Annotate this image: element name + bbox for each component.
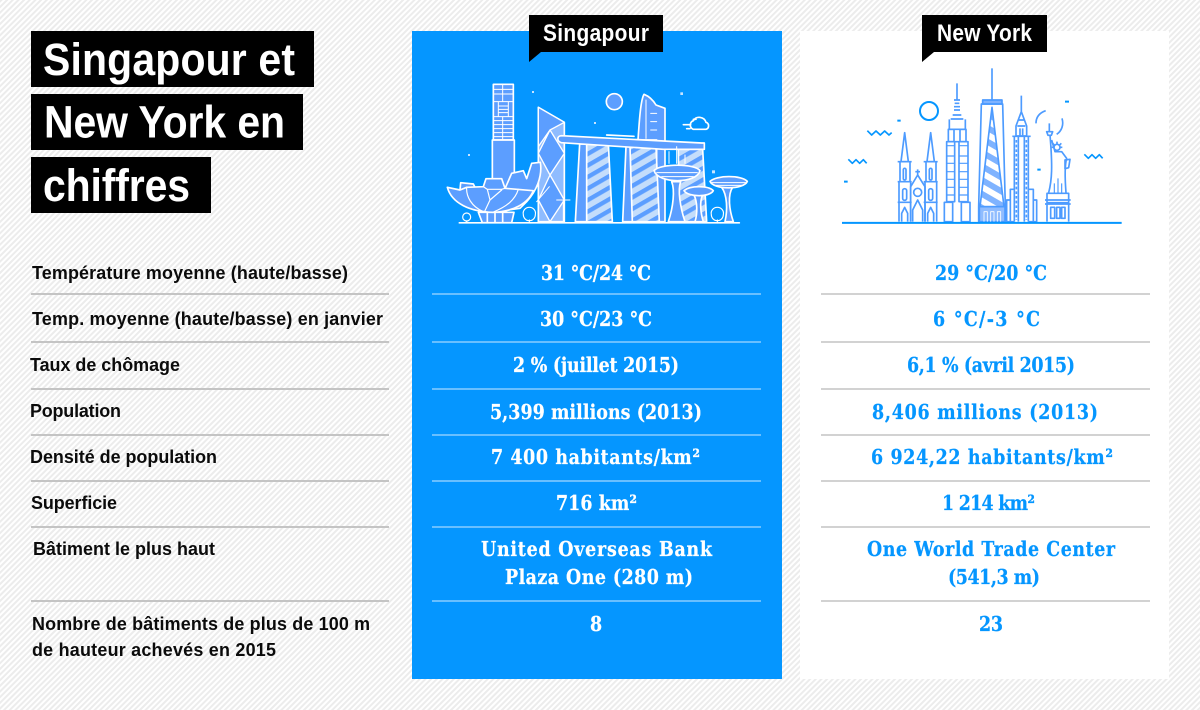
title: chiffres [43,161,190,212]
panel: New York [800,15,1169,679]
icon: Singapore skyline [447,84,747,223]
panel: row labels: Temp. moyenne (haute/basse) en janvier [32,309,383,329]
panel: Singapour [412,15,782,679]
panel: row labels [30,263,389,660]
panel: Singapour values: 5,399 millions (2013) [490,401,702,424]
title: New York en [44,98,285,148]
panel: Singapour values: 31 °C/24 °C [541,262,651,285]
panel: row labels: Taux de chômage [30,355,180,375]
panel: row labels: Bâtiment le plus haut [33,539,215,559]
panel: New York values: 29 °C/20 °C [935,262,1047,285]
panel: row labels: Température moyenne (haute/basse) [32,263,348,283]
panel: Singapour values: 2 % (juillet 2015) [513,354,679,377]
panel: New York values: 6 924,22 habitants/km² [871,446,1113,469]
title [31,31,314,213]
panel: New York values: 6,1 % (avril 2015) [907,354,1075,377]
panel: row labels: Densité de population [30,447,217,467]
tag: Singapour: Singapour [543,20,649,46]
panel: Singapour values: 30 °C/23 °C [540,308,652,331]
panel: New York values: One World Trade Center [867,538,1116,561]
panel: row labels: de hauteur achevés en 2015 [32,640,276,660]
panel: Singapour values: 8 [590,613,602,636]
icon: New York skyline [842,68,1122,223]
panel: Singapour values: 716 km² [556,492,637,515]
panel: Singapour values: United Overseas Bank [481,538,713,561]
panel: New York values: 1 214 km² [942,492,1035,515]
panel: New York values [821,262,1150,636]
panel: New York values: 6 °C/-3 °C [933,308,1040,331]
tag: New York: New York [937,20,1032,46]
panel: Singapour values [432,262,761,636]
tag: New York [922,15,1047,62]
panel: New York values: 8,406 millions (2013) [872,401,1098,424]
tag: Singapour [529,15,663,62]
panel: Singapour values: 7 400 habitants/km² [491,446,700,469]
panel: row labels: Nombre de bâtiments de plus de 100 m [32,614,370,634]
panel: Singapour values: Plaza One (280 m) [505,566,693,589]
panel: row labels: Superficie [31,493,117,513]
panel: New York values: (541,3 m) [948,566,1040,589]
panel: New York values: 23 [979,613,1003,636]
title: Singapour et [43,35,295,86]
panel: row labels: Population [30,401,121,421]
